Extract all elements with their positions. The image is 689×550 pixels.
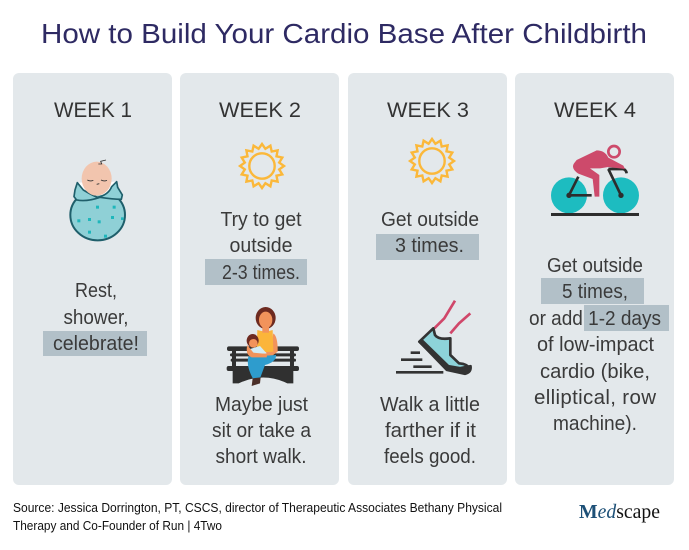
icon: mother and baby on bench [227, 307, 299, 386]
text: try to get outside: Try to get [220, 208, 302, 231]
text: walk a little farther [380, 393, 480, 468]
source text [13, 500, 502, 533]
text: get outside 5 times: Get outside [547, 254, 643, 277]
text: get outside 5 times: elliptical, row [534, 386, 656, 409]
heading: week 4: WEEK 4 [554, 99, 636, 122]
icon: running shoe [396, 301, 471, 374]
text: try to get outside: 2-3 times. [222, 261, 300, 284]
text: get outside 5 times: of low-impact [537, 333, 654, 356]
panel: week 2 [180, 73, 339, 485]
icon: swaddled baby [70, 160, 125, 240]
heading: week 1: WEEK 1 [54, 99, 132, 122]
text: get outside 5 times: or add 1-2 days [529, 307, 661, 330]
text: walk a little farther: feels good. [384, 445, 476, 468]
logo: Medscape: Medscape [579, 501, 660, 523]
text: walk a little farther: farther if it [385, 419, 476, 442]
text: get outside: 3 times. [395, 234, 464, 257]
highlight: 1-2 days [584, 305, 669, 331]
icon: cyclist [551, 146, 639, 216]
icon: sun [410, 139, 454, 183]
text: maybe just sit: sit or take a [212, 419, 312, 442]
text: try to get outside: outside [230, 234, 292, 257]
highlight: 2-3 times [205, 259, 307, 285]
panel: week 1 [13, 73, 172, 485]
highlight: 3 times [376, 234, 479, 260]
text: get outside 5 times: 5 times, [562, 280, 628, 303]
text: get outside 5 times: machine). [553, 412, 637, 435]
panel: week 3 [348, 73, 507, 485]
highlight: 5 times [541, 278, 644, 304]
source text: Therapy and Co-Founder of Run | 4Two [13, 518, 222, 533]
text: maybe just sit [212, 393, 312, 468]
text: maybe just sit: Maybe just [215, 393, 308, 416]
text: rest: celebrate! [53, 332, 139, 355]
text: get outside [381, 208, 479, 257]
panel: week 4 [515, 73, 674, 485]
source text: Source: Jessica Dorrington, PT, CSCS, director of Therapeutic Associates Bethany Physical [13, 500, 502, 515]
heading: week 3: WEEK 3 [387, 99, 469, 122]
text: get outside: Get outside [381, 208, 479, 231]
text: walk a little farther: Walk a little [380, 393, 480, 416]
heading: week 2: WEEK 2 [219, 99, 301, 122]
highlight: celebrate [43, 331, 147, 356]
text: get outside 5 times [529, 254, 661, 435]
title: How to Build Your Cardio Base After Childbirth [41, 18, 647, 49]
text: maybe just sit: short walk. [216, 445, 306, 468]
icon: sun [240, 144, 284, 188]
text: get outside 5 times: cardio (bike, [540, 360, 650, 383]
text: rest: shower, [64, 306, 128, 329]
text: try to get outside [220, 208, 302, 284]
text: rest [53, 279, 139, 355]
text: rest: Rest, [75, 279, 117, 302]
